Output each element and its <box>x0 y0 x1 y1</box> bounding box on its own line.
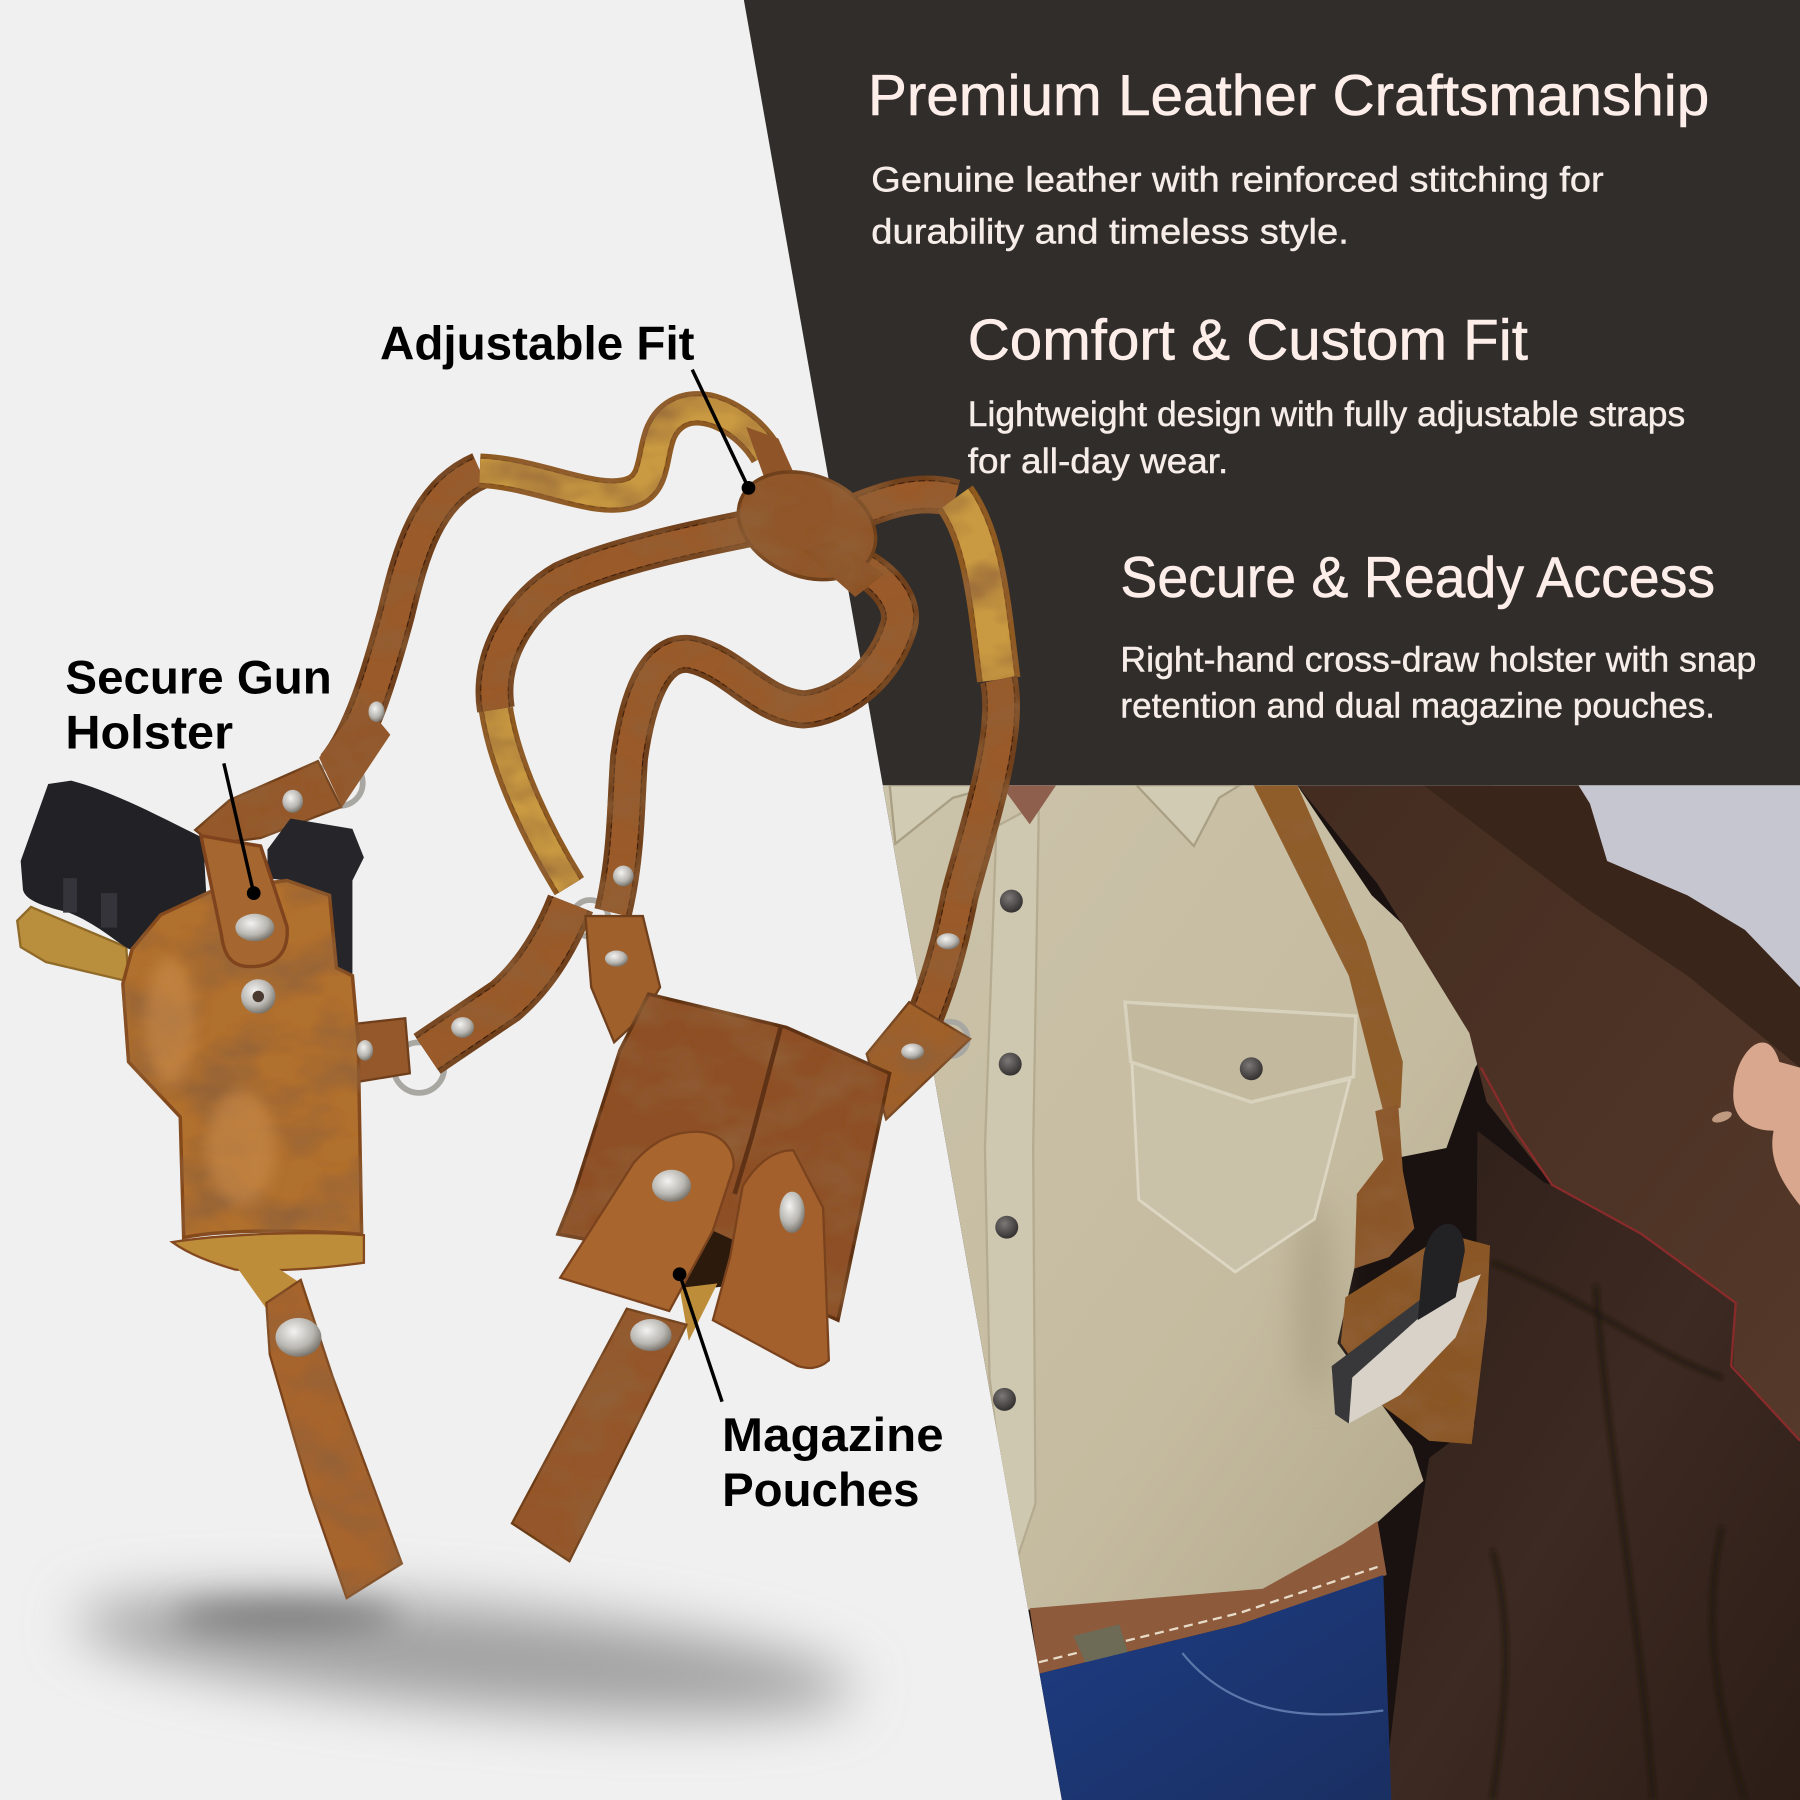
dark text panel <box>744 0 1800 785</box>
jacket lining <box>1383 1131 1800 1800</box>
jeans <box>1039 1575 1391 1800</box>
holster bottom opening <box>172 1233 364 1270</box>
worn strap on shirt <box>1254 785 1414 1268</box>
yoke top tab <box>746 427 798 491</box>
holster label second line: Holster <box>65 705 233 758</box>
shirt collar <box>890 785 1240 846</box>
callout: adjustable fit: Adjustable Fit <box>380 316 695 369</box>
callout: secure gun holster: Secure Gun <box>65 650 332 703</box>
flap snap <box>235 914 274 941</box>
pouch shade behind flaps <box>680 1231 758 1291</box>
shirt placket <box>985 804 1039 1573</box>
pistol slide <box>267 818 364 976</box>
callout: magazine pouches <box>673 1267 944 1516</box>
comfort description: Lightweight design with fully adjustable straps <box>968 394 1685 434</box>
magazine pouch body <box>558 994 890 1320</box>
left pouch flap <box>560 1132 734 1311</box>
tail strap body <box>266 1280 402 1598</box>
metal rings <box>317 760 968 1093</box>
belt stitching <box>1039 1567 1378 1662</box>
strap: yoke to pouch arch <box>613 551 900 913</box>
pouch right connector <box>867 1002 970 1119</box>
pouch divider <box>735 1027 781 1194</box>
hand <box>1733 1043 1800 1205</box>
shirt buttons <box>993 890 1023 1411</box>
feature: comfort and fit: Comfort & Custom Fit <box>968 308 1528 372</box>
right flap snap <box>779 1192 805 1233</box>
callout: adjustable fit <box>380 316 755 495</box>
tail strap under pouch <box>512 1283 717 1561</box>
neck <box>1007 786 1056 824</box>
leader line <box>692 370 755 495</box>
premium leather description <box>871 160 1604 251</box>
right pouch flap <box>713 1150 829 1368</box>
comfort description <box>968 394 1685 481</box>
upper holster connector <box>195 761 341 844</box>
yoke cross strap <box>804 540 884 597</box>
premium leather description: durability and timeless style. <box>871 211 1349 251</box>
left collar <box>888 785 970 846</box>
secure access description: Right-hand cross-draw holster with snap <box>1120 640 1756 680</box>
pouch upper strap <box>585 916 660 1042</box>
tail snap <box>276 1318 321 1357</box>
yoke knot patch <box>722 452 892 599</box>
upper right connector wrap <box>319 700 390 807</box>
feature: comfort and fit <box>968 308 1685 481</box>
pistol grip <box>1332 1274 1481 1423</box>
jeans pocket seam <box>1182 1653 1383 1714</box>
photo backdrop <box>1492 785 1800 988</box>
strap rivets <box>282 701 960 1061</box>
ground shadow <box>72 1571 858 1740</box>
pouches label second line: Pouches <box>722 1463 920 1516</box>
photo: man wearing holster <box>883 785 1800 1800</box>
button hole <box>1712 1111 1732 1122</box>
callout: magazine pouches: Magazine <box>722 1408 944 1461</box>
belt loop tip <box>1074 1624 1128 1662</box>
lower holster connector <box>354 1018 410 1083</box>
grip texture <box>63 878 117 928</box>
feature: premium leather <box>868 64 1709 251</box>
pocket button <box>1240 1057 1263 1080</box>
strap: twist to holster <box>427 517 809 1054</box>
feature: premium leather: Premium Leather Craftsmanship <box>868 64 1709 128</box>
pouch tail snap <box>630 1319 672 1351</box>
shirt shading <box>1296 1194 1333 1401</box>
belt <box>1030 1521 1387 1674</box>
comfort description: for all-day wear. <box>968 441 1228 481</box>
lower strap tab <box>1355 1104 1414 1268</box>
retention flap <box>201 836 287 967</box>
pistol magazine base <box>1332 1300 1420 1424</box>
premium leather description: Genuine leather with reinforced stitching for <box>871 160 1604 200</box>
shadow dark core <box>172 1603 402 1630</box>
product: shoulder holster rig <box>17 408 1001 1598</box>
redrawn connector rivets <box>605 951 924 1060</box>
holster stud <box>241 979 276 1014</box>
jacket sleeve <box>1424 785 1800 1068</box>
shirt pocket <box>1125 1002 1356 1272</box>
callout: secure gun holster <box>65 650 332 900</box>
strap: yoke to right side <box>832 494 1001 1016</box>
strap: rear left to yoke <box>335 408 767 767</box>
pouch tail body <box>512 1309 686 1561</box>
lining folds <box>1492 1263 1745 1800</box>
pocket flap <box>1125 1002 1356 1102</box>
secure access description <box>1120 640 1756 725</box>
secure access description: retention and dual magazine pouches. <box>1120 685 1715 725</box>
feature: secure access <box>1120 546 1756 725</box>
leader line pouches <box>673 1267 722 1402</box>
suede back of holster <box>17 907 129 982</box>
photo dark base <box>883 785 1800 1800</box>
small holster on body <box>1332 1224 1490 1444</box>
left flap snap <box>652 1170 691 1202</box>
tail strap under holster <box>235 1263 402 1598</box>
red stitching <box>1481 1068 1800 1441</box>
pistol grip <box>21 781 207 949</box>
shirt <box>883 785 1492 1630</box>
pistol slide <box>1418 1224 1465 1320</box>
jacket front panel <box>1297 785 1800 1441</box>
feature: secure access: Secure & Ready Access <box>1120 546 1715 610</box>
holster highlights <box>145 959 276 1205</box>
holster body <box>123 880 362 1238</box>
leader line holster <box>224 763 261 900</box>
